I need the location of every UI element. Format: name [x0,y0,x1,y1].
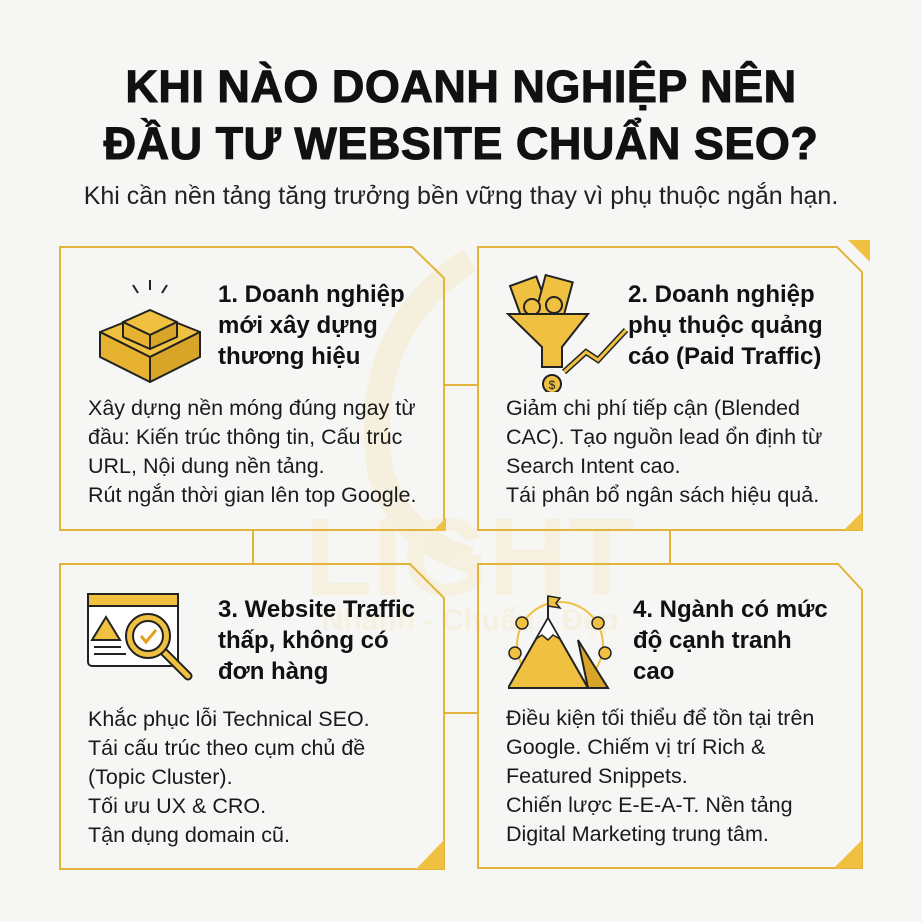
heading 1: mới xây dựng [218,312,378,339]
body 1: đầu: Kiến trúc thông tin, Cấu trúc [88,425,402,449]
body 3: Tái cấu trúc theo cụm chủ đề [88,736,365,760]
heading 3: đơn hàng [218,658,328,685]
title: ĐẦU TƯ WEBSITE CHUẨN SEO? [104,118,818,169]
icon: money funnel [506,274,628,392]
body 1: URL, Nội dung nền tảng. [88,454,325,478]
body 3: Tối ưu UX & CRO. [88,794,266,818]
body 2: Giảm chi phí tiếp cận (Blended [506,396,800,420]
heading 3: thấp, không có [218,627,389,654]
body 2 [506,396,822,507]
icon: money funnel: $ [549,378,556,392]
subtitle: Khi cần nền tảng tăng trưởng bền vững thay vì phụ thuộc ngắn hạn. [84,182,838,210]
body 2: CAC). Tạo nguồn lead ổn định từ [506,425,822,449]
icon: mountain with flag [508,595,612,689]
heading 1 [218,281,405,370]
body 4: Chiến lược E-E-A-T. Nền tảng [506,793,793,817]
title [103,60,818,169]
panel 3 [87,593,415,847]
heading 4 [633,596,828,685]
body 4: Điều kiện tối thiểu để tồn tại trên [506,706,814,730]
heading 2 [628,281,823,370]
heading 4: 4. Ngành có mức [633,596,828,623]
watermark: LIGHT logo: LIGHT [305,496,635,619]
heading 2: cáo (Paid Traffic) [628,343,821,370]
heading 2: phụ thuộc quảng [628,312,823,339]
body 4: Featured Snippets. [506,764,688,788]
body 2: Tái phân bổ ngân sách hiệu quả. [506,483,819,507]
body 3: (Topic Cluster). [88,765,233,789]
heading 1: 1. Doanh nghiệp [218,281,405,308]
heading 1: thương hiệu [218,343,360,370]
heading 4: độ cạnh tranh [633,627,792,654]
body 2: Search Intent cao. [506,454,680,478]
body 1: Rút ngắn thời gian lên top Google. [88,483,416,507]
title: KHI NÀO DOANH NGHIỆP NÊN [125,61,797,112]
heading 3: 3. Website Traffic [218,596,415,623]
body 4: Digital Marketing trung tâm. [506,822,769,846]
body 4: Google. Chiếm vị trí Rich & [506,735,765,759]
heading 4: cao [633,658,674,685]
body 1: Xây dựng nền móng đúng ngay từ [88,396,416,420]
body 3 [88,707,370,847]
panel 4 [506,595,828,846]
icon: gold bricks [99,280,201,383]
body 3: Tận dụng domain cũ. [88,823,290,847]
panel 1 [88,280,416,507]
heading 2: 2. Doanh nghiệp [628,281,815,308]
body 4 [506,706,814,846]
body 3: Khắc phục lỗi Technical SEO. [88,707,370,731]
watermark: LIGHT logo: Nhanh - Chuẩn - Đẹp [322,604,618,637]
panel 2 [506,274,823,507]
heading 3 [218,596,415,685]
icon: browser with magnifier [87,593,192,680]
body 1 [88,396,416,507]
